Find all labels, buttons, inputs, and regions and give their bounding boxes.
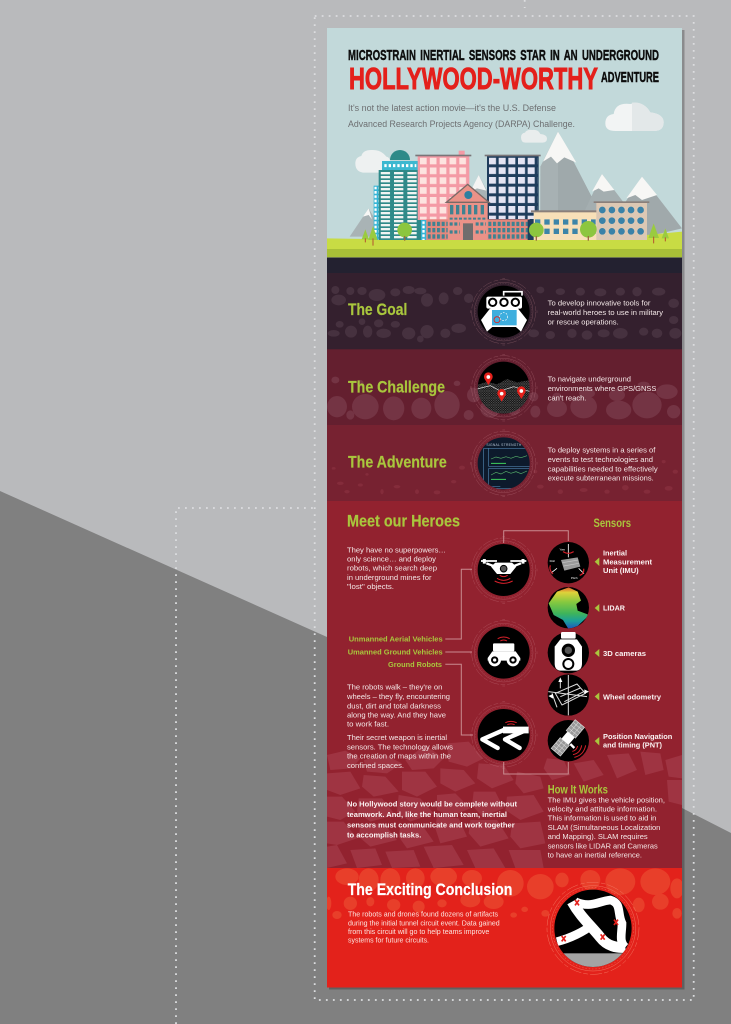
sensor label: PNT: Position Navigation	[603, 732, 673, 741]
challenge description: environments where GPS/GNSS	[548, 384, 656, 393]
sensor label: IMU: Unit (IMU)	[603, 566, 639, 575]
icon: signal monitor	[470, 430, 537, 497]
dotted outline frames	[176, 0, 694, 1024]
robots paragraph: to work fast.	[347, 720, 389, 729]
adventure description: capabilities needed to effectively	[548, 464, 658, 473]
sensor label: wheel odometry: Wheel odometry	[603, 692, 662, 701]
how it works paragraph: The IMU gives the vehicle position,	[548, 795, 665, 804]
sensor icon: satellite	[548, 720, 589, 761]
teamwork paragraph: sensors must communicate and work together	[347, 821, 515, 830]
intro paragraph: They have no superpowers…	[347, 545, 446, 554]
sensor label: PNT	[595, 732, 673, 750]
heading: the challenge: The Challenge	[348, 379, 445, 397]
conclusion paragraph	[348, 910, 500, 945]
panel: meet our heroes	[327, 501, 682, 868]
secret weapon paragraph	[347, 733, 453, 770]
sensor label: IMU	[595, 549, 652, 575]
robots paragraph: The robots walk – they're on	[347, 682, 442, 691]
challenge description: can't reach.	[548, 393, 586, 402]
building: central hall	[446, 184, 489, 240]
heading: the goal: The Goal	[348, 301, 407, 319]
intro text: It's not the latest action movie—it's the U.S. Defense	[348, 103, 556, 113]
robot type labels	[348, 635, 443, 669]
icon: remote controller	[470, 278, 537, 345]
robots paragraph: along the way. And they have	[347, 710, 446, 719]
how it works paragraph: and Mapping). SLAM requires	[548, 832, 648, 841]
conclusion paragraph: from this circuit will go to help teams improve	[348, 927, 489, 936]
heading: the adventure: The Adventure	[348, 454, 447, 472]
building: beige block	[531, 210, 597, 240]
goal description: or rescue operations.	[548, 317, 619, 326]
intro paragraph: only science… and deploy	[347, 554, 436, 564]
title word: Adventure: ADVENTURE	[601, 70, 659, 86]
icon: trees	[362, 221, 669, 246]
sensor label: PNT: and timing (PNT)	[603, 741, 662, 750]
how it works paragraph: sensors like LIDAR and Cameras	[548, 841, 658, 850]
secret weapon paragraph: confined spaces.	[347, 761, 404, 770]
goal description: To develop innovative tools for	[548, 299, 651, 308]
building: tan block	[594, 201, 649, 240]
secret weapon paragraph: sensors. The technology allows	[347, 742, 453, 751]
sensor label: 3D cameras: 3D cameras	[603, 649, 646, 658]
intro paragraph: in underground mines for	[347, 573, 432, 582]
robots paragraph: dust, dirt and total darkness	[347, 701, 441, 710]
sensor icon: 3D camera	[548, 632, 589, 673]
sensor icon: IMU: Roll	[550, 559, 555, 563]
teamwork paragraph: teamwork. And, like the human team, inertial	[347, 810, 507, 819]
conclusion paragraph: during the initial tunnel circuit event. Data gained	[348, 919, 500, 928]
adventure description: events to test technologies and	[548, 455, 653, 464]
conclusion paragraph: The robots and drones found dozens of artifacts	[348, 910, 498, 919]
how it works paragraph: This information is used to aid in	[548, 814, 656, 823]
sensor icon: wheel odometry	[548, 674, 589, 716]
intro paragraph	[347, 545, 446, 591]
goal pebble texture	[328, 286, 681, 342]
connector lines	[445, 531, 568, 774]
adventure description	[548, 446, 658, 483]
robots paragraph: wheels – they fly, encountering	[346, 692, 450, 701]
teamwork paragraph	[347, 800, 517, 840]
icon: tunnel map with X markers	[547, 882, 639, 974]
panel: the exciting conclusion	[326, 867, 684, 988]
intro paragraph: robots, which search deep	[347, 564, 437, 573]
building: pink tower	[415, 151, 471, 220]
illustration: city skyline	[327, 102, 682, 257]
adventure description: To deploy systems in a series of	[548, 446, 656, 455]
sensor icon: IMU: Yaw	[559, 547, 566, 551]
robot type labels: Unmanned Aerial Vehicles	[349, 635, 443, 644]
intro paragraph: "lost" objects.	[347, 582, 394, 591]
teamwork paragraph: No Hollywood story would be complete without	[347, 800, 517, 809]
adventure description: execute subterranean missions.	[548, 474, 654, 483]
conclusion paragraph: systems for future circuits.	[348, 936, 429, 945]
secret weapon paragraph: Their secret weapon is inertial	[347, 733, 447, 742]
heading: the exciting conclusion: The Exciting Conclusion	[348, 881, 512, 899]
icon: terrain map with pins	[470, 354, 537, 421]
icon: signal monitor: SIGNAL STRENGTH	[486, 443, 522, 447]
icon: clouds	[355, 102, 664, 173]
dark underground strip	[327, 258, 682, 274]
sensor icon: IMU	[548, 542, 589, 583]
adventure speck texture	[332, 460, 678, 494]
sensor icon: IMU: Pitch	[571, 576, 578, 580]
challenge pebble texture	[327, 377, 680, 420]
sensor label: IMU: Inertial	[603, 549, 627, 558]
background: dark grey diagonal	[0, 491, 731, 1024]
intro text: Advanced Research Projects Agency (DARPA) Challenge.	[348, 119, 575, 129]
title line 2: Hollywood-Worthy: HOLLYWOOD-WORTHY	[349, 61, 598, 96]
icon: mountains	[350, 132, 682, 240]
robot type labels: Umanned Ground Vehicles	[348, 647, 443, 656]
conclusion pebble texture	[326, 867, 684, 919]
icon: drone	[470, 537, 537, 603]
challenge description	[548, 375, 656, 402]
how it works paragraph: to have an inertial reference.	[548, 850, 642, 859]
how it works paragraph	[548, 795, 665, 859]
heading: how it works: How It Works	[548, 782, 608, 796]
icon: ground vehicle	[470, 619, 537, 686]
how it works paragraph: SLAM (Simultaneous Localization	[548, 823, 660, 832]
sensor icon: LIDAR	[548, 587, 589, 629]
goal description: real-world heroes to use in military	[548, 308, 663, 317]
panel shadow	[329, 30, 684, 990]
panel: the adventure	[327, 425, 682, 502]
how it works paragraph: velocity and attitude information.	[548, 805, 657, 814]
heroes stone texture	[327, 742, 682, 868]
robots paragraph	[346, 682, 450, 729]
secret weapon paragraph: the creation of maps within the	[347, 752, 451, 761]
heading: meet our heroes: Meet our Heroes	[347, 513, 460, 531]
building: teal tower	[374, 150, 426, 240]
building: navy tower	[485, 155, 541, 220]
robot type labels: Ground Robots	[388, 660, 442, 669]
panel: hero header with city	[327, 28, 682, 261]
panel: the challenge	[327, 349, 682, 425]
sensor label: LIDAR: LIDAR	[603, 604, 625, 613]
teamwork paragraph: to accomplish tasks.	[347, 831, 421, 840]
icon: walking robot	[470, 702, 537, 768]
challenge description: To navigate underground	[548, 375, 631, 384]
goal description	[548, 299, 663, 326]
sensor label: IMU: Measurement	[603, 557, 652, 566]
heading: sensors: Sensors	[594, 518, 631, 530]
panel: the goal	[327, 273, 682, 350]
building: low salmon block	[426, 219, 534, 240]
intro text	[348, 103, 575, 129]
ground	[327, 232, 682, 257]
